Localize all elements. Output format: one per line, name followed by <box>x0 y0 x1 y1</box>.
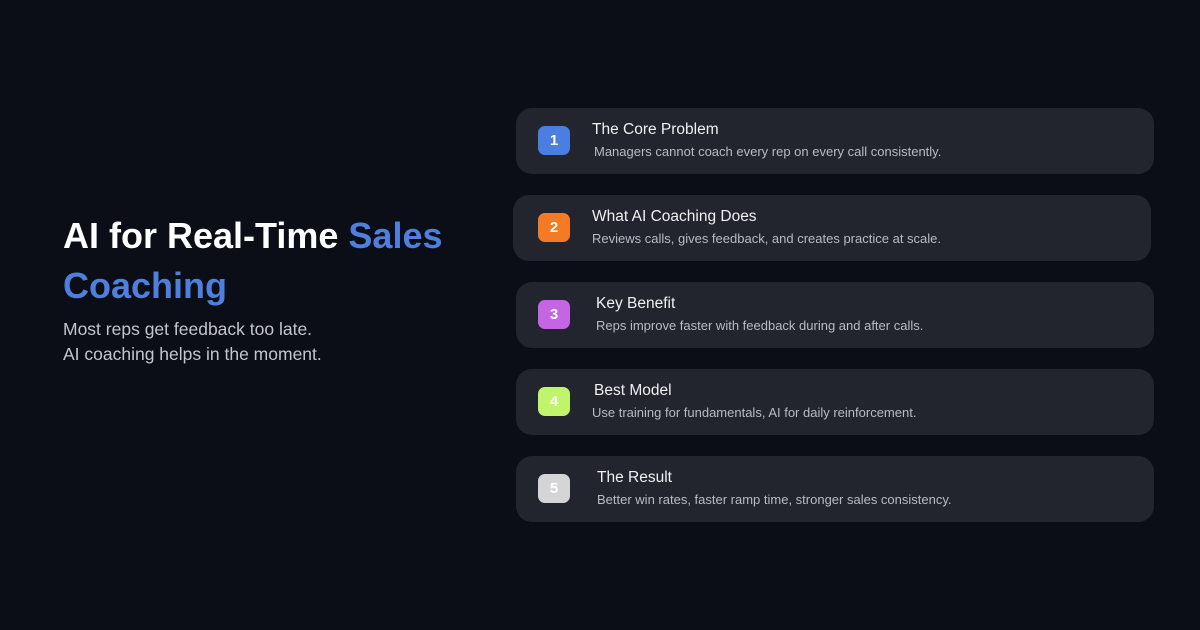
badge 1: 1 <box>550 132 558 149</box>
subtitle: Most reps get feedback too late. <box>63 319 312 339</box>
badge 2 <box>538 213 570 242</box>
badge 5 <box>538 474 570 503</box>
desc 2: Reviews calls, gives feedback, and creates practice at scale. <box>592 231 941 246</box>
card 4 <box>516 369 1154 435</box>
desc 4: Use training for fundamentals, AI for daily reinforcement. <box>592 405 916 420</box>
card 2 <box>513 195 1151 261</box>
badge 4 <box>538 387 570 416</box>
badge 1 <box>538 126 570 155</box>
title: AI for Real-Time Sales Coaching <box>63 215 442 306</box>
title 5: The Result <box>597 469 672 486</box>
title 1: The Core Problem <box>592 121 719 138</box>
desc 3: Reps improve faster with feedback during and after calls. <box>596 318 923 333</box>
card 3 <box>516 282 1154 348</box>
badge 3: 3 <box>550 306 558 323</box>
card 5 <box>516 456 1154 522</box>
badge 3 <box>538 300 570 329</box>
desc 1: Managers cannot coach every rep on every call consistently. <box>594 144 941 159</box>
subtitle <box>63 319 322 364</box>
badge 2: 2 <box>550 219 558 236</box>
desc 5: Better win rates, faster ramp time, stronger sales consistency. <box>597 492 952 507</box>
subtitle: AI coaching helps in the moment. <box>63 344 322 364</box>
title 2: What AI Coaching Does <box>592 208 757 225</box>
card 1 <box>516 108 1154 174</box>
badge 5: 5 <box>550 480 558 497</box>
title 4: Best Model <box>594 382 672 399</box>
badge 4: 4 <box>550 393 558 410</box>
title 3: Key Benefit <box>596 295 675 312</box>
